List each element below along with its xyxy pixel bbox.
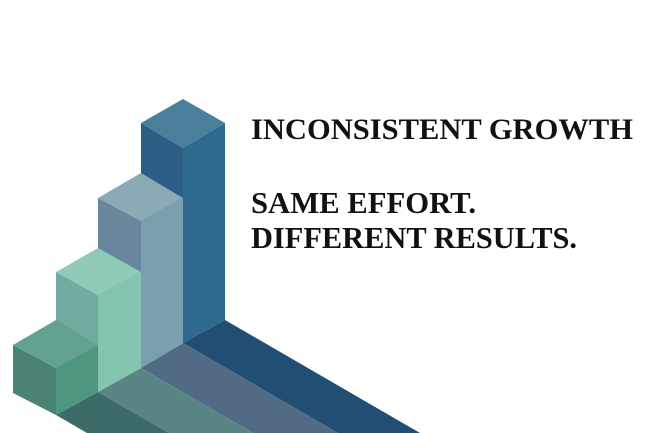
bar chart: isometric growth bars <box>13 99 420 433</box>
text block: tagline <box>251 185 577 255</box>
text block: tagline: DIFFERENT RESULTS. <box>251 220 577 255</box>
bar 4: tallest <box>141 99 225 343</box>
shadow strips <box>56 320 420 433</box>
text block: tagline: SAME EFFORT. <box>251 185 476 220</box>
title: inconsistent growth: INCONSISTENT GROWTH <box>251 113 633 146</box>
bar 2 <box>56 248 141 392</box>
bar 3 <box>98 173 183 368</box>
bar 1: shortest <box>13 320 98 415</box>
